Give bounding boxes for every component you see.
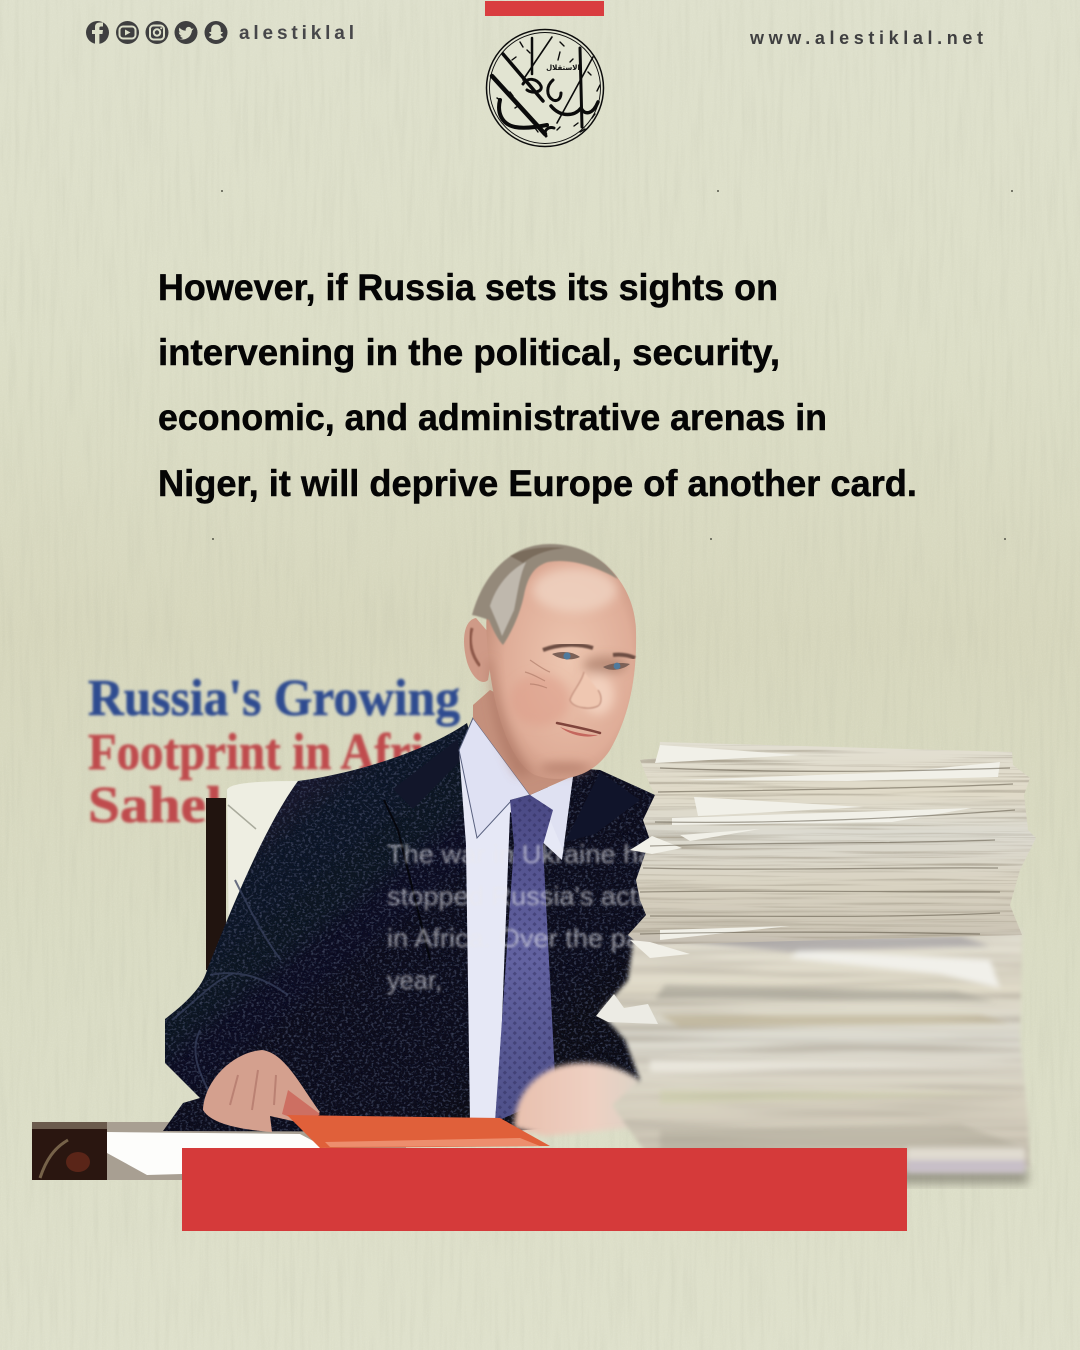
chair bbox=[206, 781, 313, 1109]
face bbox=[486, 546, 636, 779]
torn edge over jacket bbox=[596, 994, 658, 1024]
blurred body text overlay: The war in Ukraine has bbox=[387, 839, 667, 869]
icon: youtube bbox=[116, 21, 139, 44]
mouth bbox=[557, 723, 600, 733]
ear bbox=[464, 618, 495, 682]
orange folder bbox=[287, 1115, 550, 1148]
blurred body text overlay bbox=[386, 842, 646, 996]
person: seated man in suit bbox=[163, 544, 660, 1136]
lapel bbox=[393, 739, 460, 809]
blurred article headline: Russia's Growing bbox=[88, 670, 460, 727]
face shading bbox=[488, 568, 627, 775]
shirt bbox=[459, 718, 573, 1125]
blurred article headline: Footprint in Africa bbox=[88, 724, 468, 781]
sleeve highlights bbox=[172, 880, 288, 1090]
logo: circular calligraphy seal bbox=[486, 30, 604, 146]
main statement text: Niger, it will deprive Europe of another card. bbox=[158, 463, 917, 504]
bottom red bar bbox=[182, 1148, 907, 1231]
icon: facebook bbox=[86, 21, 109, 44]
lower blurred sheets bbox=[600, 930, 1030, 1173]
blurred body text overlay: year, bbox=[387, 965, 442, 995]
main statement text: However, if Russia sets its sights on bbox=[158, 267, 778, 308]
website address: www.alestiklal.net bbox=[749, 28, 983, 48]
main statement text: intervening in the political, security, bbox=[158, 332, 780, 373]
desk and objects bbox=[32, 1122, 406, 1180]
blurred article headline: Sahel bbox=[88, 777, 222, 834]
top red tab bbox=[485, 1, 604, 16]
logo: circular calligraphy seal: الاستقلال bbox=[546, 64, 580, 72]
stack shadow bbox=[660, 1168, 1028, 1184]
icon: instagram bbox=[146, 21, 168, 44]
brand handle: alestiklal bbox=[239, 23, 354, 44]
left hand bbox=[203, 1050, 320, 1132]
head bbox=[464, 544, 636, 795]
eyebrows bbox=[543, 645, 635, 658]
upper crisp sheets bbox=[628, 742, 1036, 958]
tie bbox=[495, 795, 556, 1122]
paper stack bbox=[596, 742, 1036, 1184]
icon: snapchat bbox=[204, 21, 228, 44]
suit jacket bbox=[163, 723, 660, 1132]
main statement text: economic, and administrative arenas in bbox=[158, 397, 827, 438]
neck bbox=[473, 690, 590, 795]
hair bbox=[472, 544, 618, 645]
blurred body text overlay: stopped Russia's active bbox=[387, 881, 672, 911]
social icons row bbox=[86, 21, 228, 44]
blurred body text overlay: in Africa. Over the past bbox=[387, 923, 663, 953]
right hand bbox=[514, 1063, 646, 1136]
eyes bbox=[552, 652, 580, 659]
folder highlight bbox=[325, 1138, 540, 1147]
icon: twitter bbox=[174, 21, 198, 44]
blurred article headline bbox=[88, 670, 468, 834]
main statement text bbox=[158, 267, 917, 504]
nose bbox=[570, 672, 601, 708]
